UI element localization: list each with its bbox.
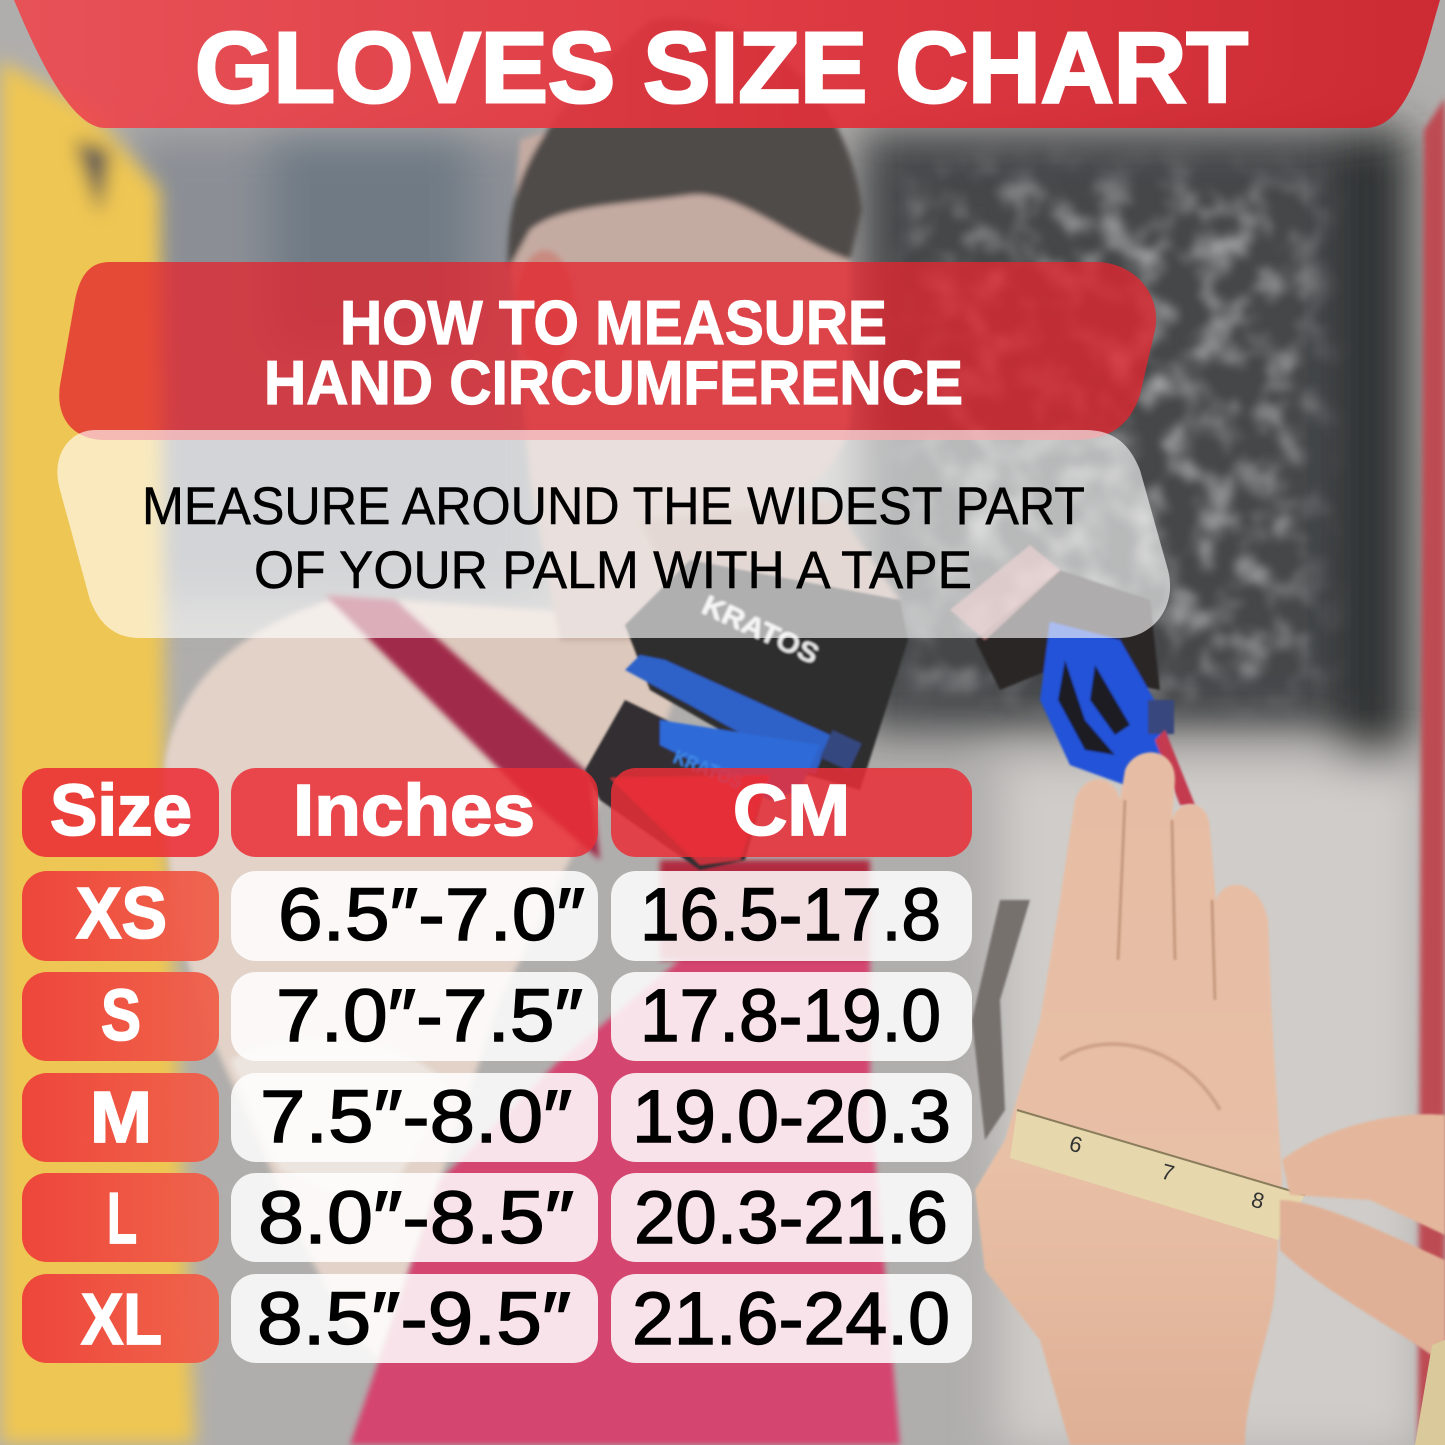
background: wall speckle [902, 154, 1337, 706]
helper fingers holding tape [1280, 1114, 1445, 1365]
row: S: 17.8-19.0 [640, 974, 941, 1057]
table header: inches: Inches [293, 771, 535, 851]
instruction text: MEASURE AROUND THE WIDEST PART [142, 477, 1085, 536]
table header: size [22, 768, 219, 857]
man: chest and shoulder [164, 600, 700, 1360]
row: M: 7.5″-8.0″ [260, 1075, 572, 1158]
measuring tape [1010, 1110, 1305, 1240]
row: XS: 16.5-17.8 [640, 873, 941, 956]
row: M: M [90, 1078, 152, 1158]
glove brand: KRATOS [697, 589, 824, 670]
row: S: S [101, 976, 141, 1056]
panel: measuring instructions [57, 430, 1170, 638]
table header: cm [611, 768, 972, 857]
glove: right [950, 545, 1195, 805]
panel: how to measure heading [59, 262, 1156, 440]
row: XS [22, 871, 972, 961]
table header: inches [231, 768, 598, 857]
background: yellow punch bag [0, 60, 195, 1445]
row: L: 20.3-21.6 [634, 1176, 948, 1259]
glove: left: KRATOS [670, 746, 745, 794]
table header: cm: CM [733, 771, 850, 851]
measuring hand [975, 752, 1282, 1445]
row: S [22, 972, 972, 1061]
row: XL: XL [81, 1280, 162, 1360]
title: GLOVES SIZE CHART [195, 12, 1248, 124]
row: XL: 21.6-24.0 [632, 1277, 950, 1360]
row: XL [22, 1274, 972, 1363]
measuring tape: 8 [1249, 1187, 1267, 1214]
table header: size: Size [50, 771, 192, 851]
row: XL: 8.5″-9.5″ [257, 1277, 571, 1360]
glove: left [585, 560, 908, 870]
panel: how to measure heading: HAND CIRCUMFERENCE [264, 349, 963, 418]
arm tattoo [972, 900, 1030, 1140]
tape numerals: 6 [1067, 1131, 1085, 1158]
heading text: HOW TO MEASURE [340, 289, 887, 358]
measuring tape: 7 [1159, 1159, 1177, 1186]
background: right red column [1418, 98, 1445, 1445]
size table [22, 768, 972, 1363]
row: M [22, 1073, 972, 1162]
panel: measuring instructions: OF YOUR PALM WITH A TAPE [254, 541, 972, 600]
row: L [22, 1173, 972, 1262]
row: L: 8.0″-8.5″ [258, 1176, 574, 1259]
tape end bottom right [1415, 1340, 1445, 1445]
row: XS: 6.5″-7.0″ [278, 873, 585, 956]
man: neck and head [508, 18, 900, 700]
row: XS: XS [76, 874, 167, 954]
row: S: 7.0″-7.5″ [276, 974, 583, 1057]
row: L: L [107, 1179, 137, 1259]
header banner [14, 0, 1440, 128]
man: red tank top [325, 595, 900, 1445]
row: M: 19.0-20.3 [632, 1075, 951, 1158]
